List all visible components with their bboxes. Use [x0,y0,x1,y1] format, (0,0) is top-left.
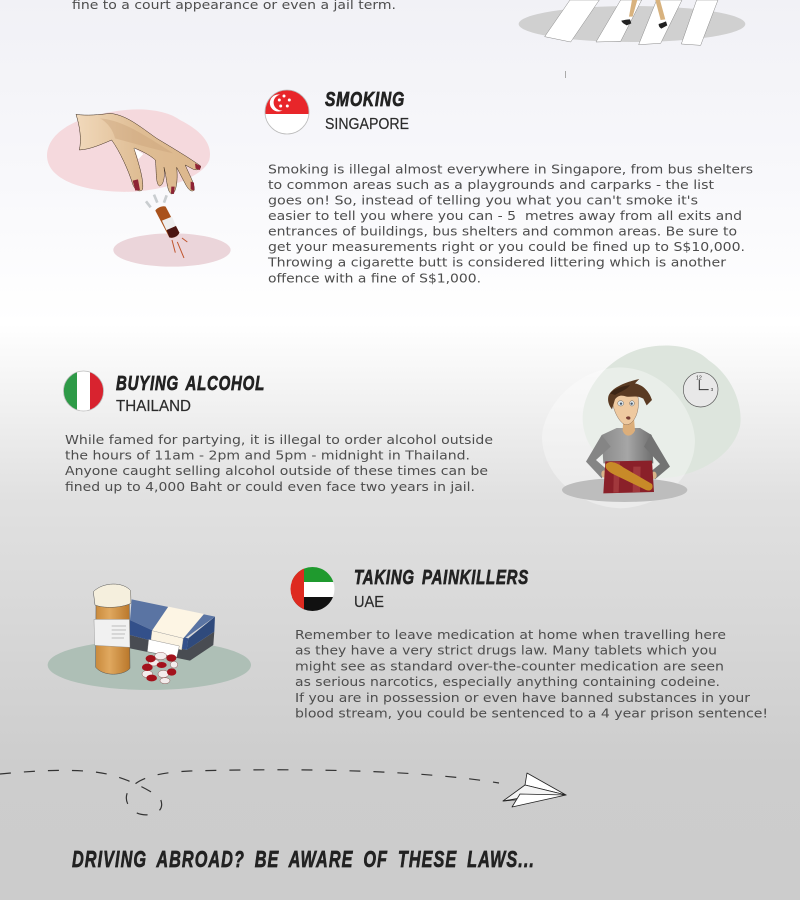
icon: paper airplane [503,773,566,807]
text block: alcohol description [65,432,493,494]
mark: small tick [565,71,566,78]
text block: smoking description: get your measurements right or you could be fined up to S$10,000. [268,239,745,254]
illustration: man with wrapped bottle and clock: 3 [711,387,714,392]
text block: alcohol description: the hours of 11am - 2pm and 5pm - midnight in Thailand. [65,448,470,462]
text block: smoking description: offence with a fine of S$1,000. [268,270,481,286]
icon: UAE flag [290,567,336,612]
text block: alcohol description: Anyone caught selling alcohol outside of these times can be [65,463,488,478]
panel: smoking [47,89,753,286]
text block: smoking description: to common areas such as a playgrounds and carparks - the list [268,177,714,192]
illustration: man with wrapped bottle and clock: 12 [696,375,702,381]
illustration: man with wrapped bottle and clock [542,346,741,508]
text block: painkillers description [295,627,768,720]
text block: smoking description: Throwing a cigarette butt is considered littering which is another [267,254,727,270]
text block: painkillers description: If you are in possession or even have banned substances in your [295,690,751,705]
text block: smoking description: easier to tell you where you can - 5 metres away from all exits and [268,208,742,223]
subheading: UAE: UAE [354,594,384,611]
illustration: pill bottle, box and pills [48,584,251,690]
heading: buying alcohol: BUYING ALCOHOL [116,373,265,395]
arrow: dashed flight path [0,770,499,815]
heading: smoking: SMOKING [325,89,405,111]
heading: driving abroad: DRIVING ABROAD? BE AWARE OF THESE LAWS... [72,846,535,872]
text block: painkillers description: blood stream, you could be sentenced to a 4 year prison sentence! [295,706,768,720]
text block: smoking description: goes on! So, instead of telling you what you can't smoke it's [268,192,698,208]
icon: Singapore flag [264,90,310,134]
illustration: hand dropping cigarette [47,109,231,267]
panel: taking painkillers [48,567,768,720]
icon: Italy flag [63,371,104,411]
heading: taking painkillers: TAKING PAINKILLERS [354,567,529,589]
text block: smoking description: entrances of buildings, bus shelters and common areas. Be sure to [268,224,737,238]
text block: painkillers description: might see as standard over-the-counter medication are seen [295,658,724,674]
text block: alcohol description: fined up to 4,000 Baht or could even face two years in jail. [65,479,475,494]
panel: buying alcohol [63,346,741,508]
text block: painkillers description: Remember to leave medication at home when travelling here [295,627,726,642]
text block: smoking description [267,162,753,286]
subheading: Thailand: THAILAND [116,398,191,415]
illustration: pedestrian crossing [519,0,745,45]
text block: painkillers description: as they have a very strict drugs law. Many tablets which you [295,642,717,658]
text block: alcohol description: While famed for partying, it is illegal to order alcohol outside [65,432,493,447]
text block: smoking description: Smoking is illegal almost everywhere in Singapore, from bus shelters [268,162,753,176]
subheading: Singapore: SINGAPORE [325,116,409,133]
text block: painkillers description: as serious narcotics, especially anything containing codeine. [295,674,720,689]
